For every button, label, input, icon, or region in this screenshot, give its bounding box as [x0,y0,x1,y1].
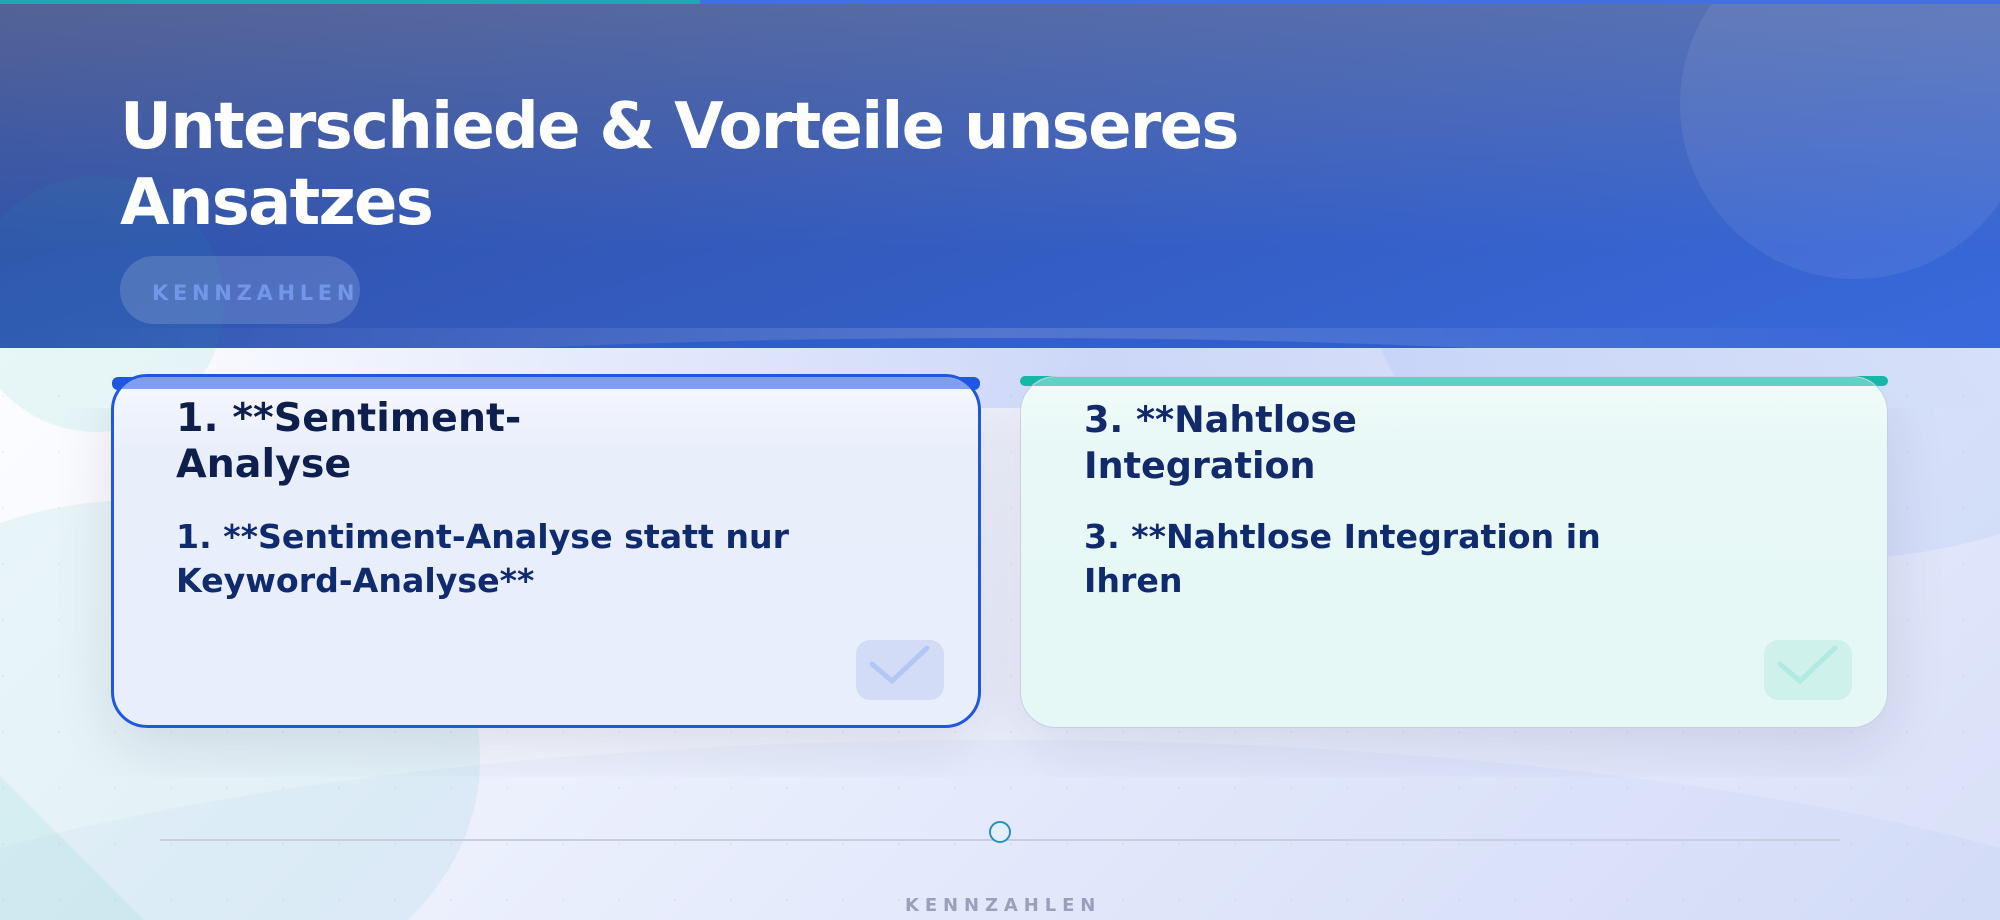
shadow card 1 [112,376,980,728]
footer label: KENNZAHLEN [905,895,1101,916]
pill: kennzahlen [120,256,360,324]
decorative circle left [0,176,224,432]
card 2 heading: Integration [1084,444,1316,487]
shadow card 2 [1020,376,1888,728]
card 1 text: 1. **Sentiment-Analyse statt nur [176,517,789,556]
decorative circle right [1680,0,2000,279]
card 2 text: Ihren [1084,561,1182,600]
card 2 text: 3. **Nahtlose Integration in [1084,517,1601,556]
icon: check 1 [856,640,944,700]
card shadows [97,408,1903,759]
card 2 body [1020,376,1888,728]
icon: check 2 [1764,640,1852,700]
footer marker circle [989,821,1011,843]
card 1 heading [176,395,521,487]
header band [0,0,2000,348]
card 1 body [111,374,981,728]
panel: card 1 [111,374,981,728]
card 1 heading: Analyse [176,441,351,487]
progress fill [0,0,700,4]
header light strip [40,328,1960,348]
header warm overlay [0,0,2000,250]
card 1 text: Keyword-Analyse** [176,561,534,600]
card 1 top bar [112,377,980,390]
footer line [160,839,1840,841]
card 1 top tint [114,377,977,389]
card 1 heading: 1. **Sentiment- [176,395,521,441]
card 2 top tint [1021,377,1887,386]
card 2 heading [1084,398,1357,487]
panel: card 2 [1020,376,1888,728]
title: Unterschiede & Vorteile unseres [120,90,1238,164]
progress bar [0,0,2000,4]
card 2 text [1084,517,1601,600]
header dark arc [150,338,1850,458]
card 1 text [176,517,789,600]
title [120,90,1238,240]
pill label: KENNZAHLEN [152,281,359,305]
card 2 heading: 3. **Nahtlose [1084,398,1357,441]
card 2 top bar [1020,376,1888,386]
title: Ansatzes [120,166,432,240]
